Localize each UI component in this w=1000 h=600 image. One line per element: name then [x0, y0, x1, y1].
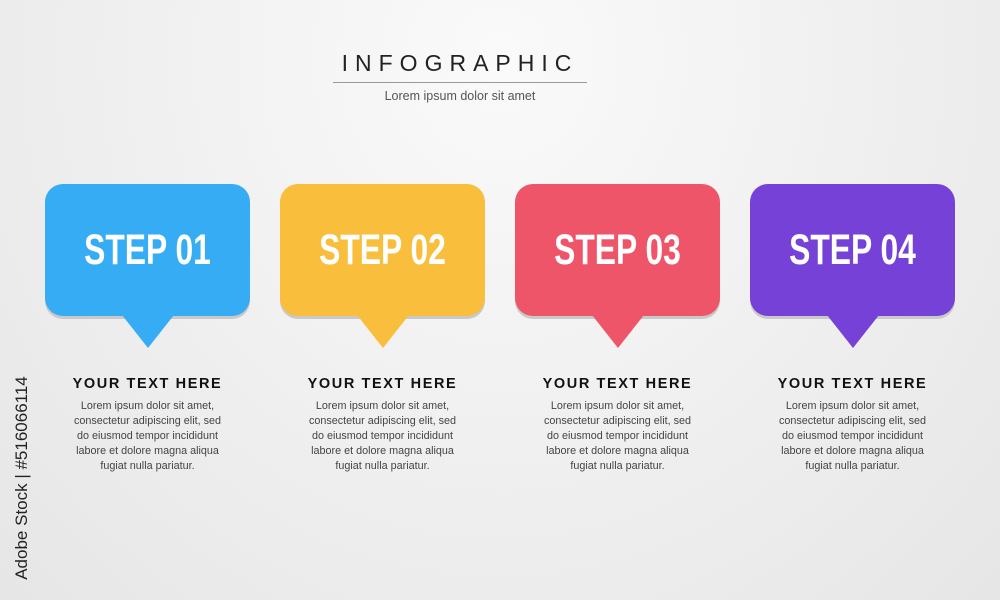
box: step 04: [750, 184, 955, 316]
heading: YOUR TEXT HERE: [73, 376, 222, 392]
box: step 01: [45, 184, 250, 316]
body text: fugiat nulla pariatur.: [335, 460, 430, 472]
box: step 03: [515, 184, 720, 316]
subtitle: [333, 82, 587, 103]
box: step 01: STEP 01: [84, 226, 211, 274]
body text: fugiat nulla pariatur.: [570, 460, 665, 472]
pointer: [592, 315, 644, 348]
pointer: [827, 315, 879, 348]
step 4: [750, 184, 955, 472]
box: step 02: [280, 184, 485, 316]
body text: do eiusmod tempor incididunt: [547, 430, 688, 442]
heading: YOUR TEXT HERE: [543, 376, 692, 392]
body text: fugiat nulla pariatur.: [100, 460, 195, 472]
body text: labore et dolore magna aliqua: [76, 445, 219, 457]
pointer: [357, 315, 409, 348]
body text: Lorem ipsum dolor sit amet,: [81, 400, 214, 412]
body text: do eiusmod tempor incididunt: [312, 430, 453, 442]
pointer: [122, 315, 174, 348]
title: INFOGRAPHIC: [342, 50, 578, 76]
step 1: [45, 184, 250, 472]
watermark id: Adobe Stock | #516066114: [12, 376, 31, 580]
body text: do eiusmod tempor incididunt: [782, 430, 923, 442]
box: step 03: STEP 03: [554, 226, 681, 274]
body text: labore et dolore magna aliqua: [311, 445, 454, 457]
body text: labore et dolore magna aliqua: [781, 445, 924, 457]
box: step 02: STEP 02: [319, 226, 446, 274]
box: step 04: STEP 04: [789, 226, 916, 274]
body text: labore et dolore magna aliqua: [546, 445, 689, 457]
subtitle: Lorem ipsum dolor sit amet: [385, 89, 535, 103]
body text: fugiat nulla pariatur.: [805, 460, 900, 472]
body text: do eiusmod tempor incididunt: [77, 430, 218, 442]
body text: [544, 400, 691, 472]
body text: Lorem ipsum dolor sit amet,: [551, 400, 684, 412]
body text: consectetur adipiscing elit, sed: [779, 415, 926, 427]
body text: [74, 400, 221, 472]
body text: Lorem ipsum dolor sit amet,: [786, 400, 919, 412]
body text: Lorem ipsum dolor sit amet,: [316, 400, 449, 412]
heading: YOUR TEXT HERE: [308, 376, 457, 392]
body text: [779, 400, 926, 472]
body text: [309, 400, 456, 472]
step 2: [280, 184, 485, 472]
body text: consectetur adipiscing elit, sed: [309, 415, 456, 427]
body text: consectetur adipiscing elit, sed: [74, 415, 221, 427]
step 3: [515, 184, 720, 472]
body text: consectetur adipiscing elit, sed: [544, 415, 691, 427]
heading: YOUR TEXT HERE: [778, 376, 927, 392]
